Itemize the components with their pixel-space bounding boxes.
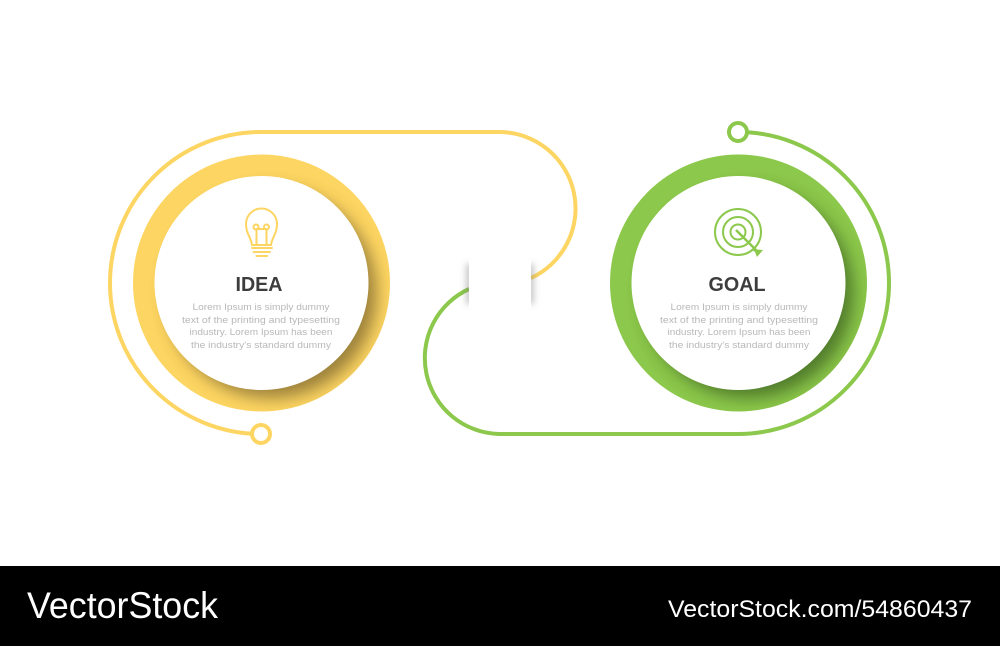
panel: idea <box>133 154 390 412</box>
body text: goal: text of the printing and typesetting <box>660 315 818 326</box>
footer bar <box>0 566 1000 646</box>
body text: idea: industry. Lorem Ipsum has been <box>190 327 332 338</box>
body text: goal: the industry's standard dummy <box>669 340 809 351</box>
footer image id: VectorStock.com/54860437 <box>668 596 972 623</box>
green end node <box>729 123 747 141</box>
footer logo text: VectorStock <box>27 585 218 626</box>
green ring <box>610 154 867 412</box>
connector: green line <box>425 132 889 434</box>
ring shadow <box>644 188 854 398</box>
fold shadow and white gap <box>466 240 534 330</box>
yellow ring <box>133 154 390 412</box>
body text: goal: industry. Lorem Ipsum has been <box>668 327 810 338</box>
body text: goal: Lorem Ipsum is simply dummy <box>670 302 808 313</box>
yellow start node <box>252 425 270 443</box>
body text: idea: the industry's standard dummy <box>191 340 331 351</box>
heading: idea: IDEA <box>236 274 282 296</box>
ring shadow <box>166 188 376 398</box>
body text: idea: text of the printing and typesetting <box>182 315 340 326</box>
icon: light bulb <box>246 208 277 256</box>
heading: goal: GOAL <box>708 274 766 296</box>
body text: goal <box>660 302 818 351</box>
connector: yellow line <box>110 132 576 434</box>
body text: idea: Lorem Ipsum is simply dummy <box>192 302 330 313</box>
white disc <box>632 176 846 390</box>
white disc <box>154 176 368 390</box>
panel: goal <box>610 154 867 412</box>
body text: idea <box>182 302 340 351</box>
icon: target with arrow <box>715 209 763 257</box>
